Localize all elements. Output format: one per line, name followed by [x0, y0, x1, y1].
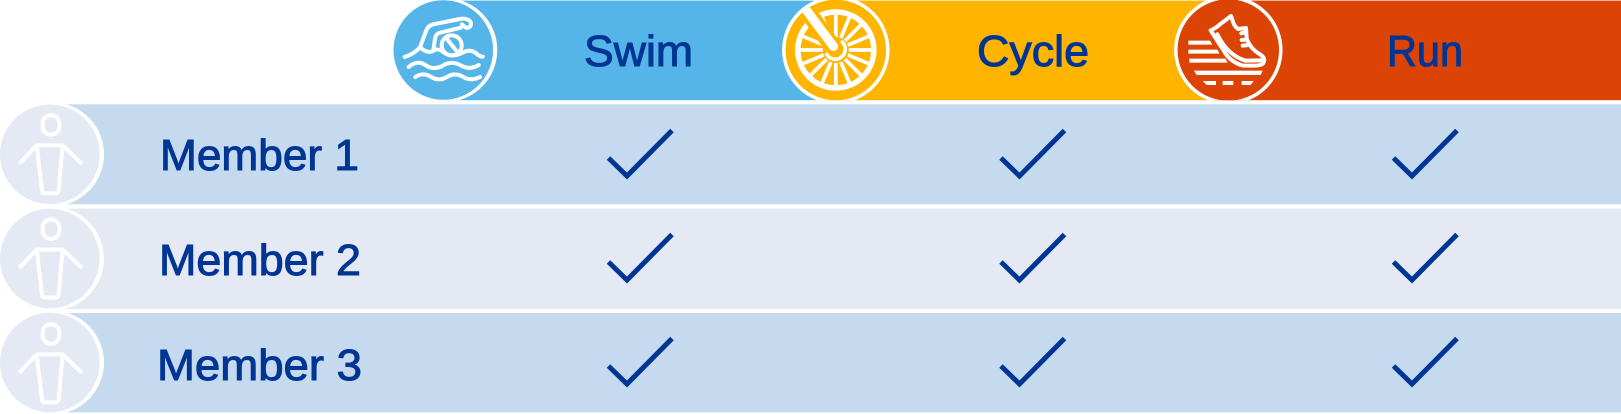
check: member 2 run	[1394, 234, 1457, 280]
label: Member 3: Member 3	[157, 341, 362, 390]
check: member 1 swim	[608, 130, 672, 176]
icon: bicycle wheel	[784, 0, 888, 102]
heading: Cycle: Cycle	[977, 27, 1089, 76]
icon: person 3	[0, 310, 104, 414]
icon: person 1	[0, 102, 104, 206]
check: member 3 run	[1394, 338, 1457, 384]
check: member 2 swim	[608, 234, 672, 280]
icon: person 2	[0, 206, 104, 310]
icon: swimmer	[393, 0, 497, 102]
check: member 3 cycle	[1001, 338, 1064, 384]
row: member 2	[0, 206, 1621, 310]
label: Member 2: Member 2	[159, 236, 361, 285]
check: member 1 cycle	[1001, 130, 1064, 176]
check: member 3 swim	[608, 338, 672, 384]
check: member 1 run	[1394, 130, 1457, 176]
icon: running shoe	[1176, 0, 1281, 102]
check: member 2 cycle	[1001, 234, 1064, 280]
row: member 3	[0, 310, 1621, 414]
heading: Run: Run	[1387, 27, 1463, 76]
heading: Swim: Swim	[584, 27, 693, 76]
column header: cycle	[784, 0, 1228, 102]
label: Member 1: Member 1	[160, 131, 359, 180]
column header: run	[1176, 0, 1621, 102]
row: member 1	[0, 102, 1621, 206]
column header: swim	[393, 0, 837, 102]
